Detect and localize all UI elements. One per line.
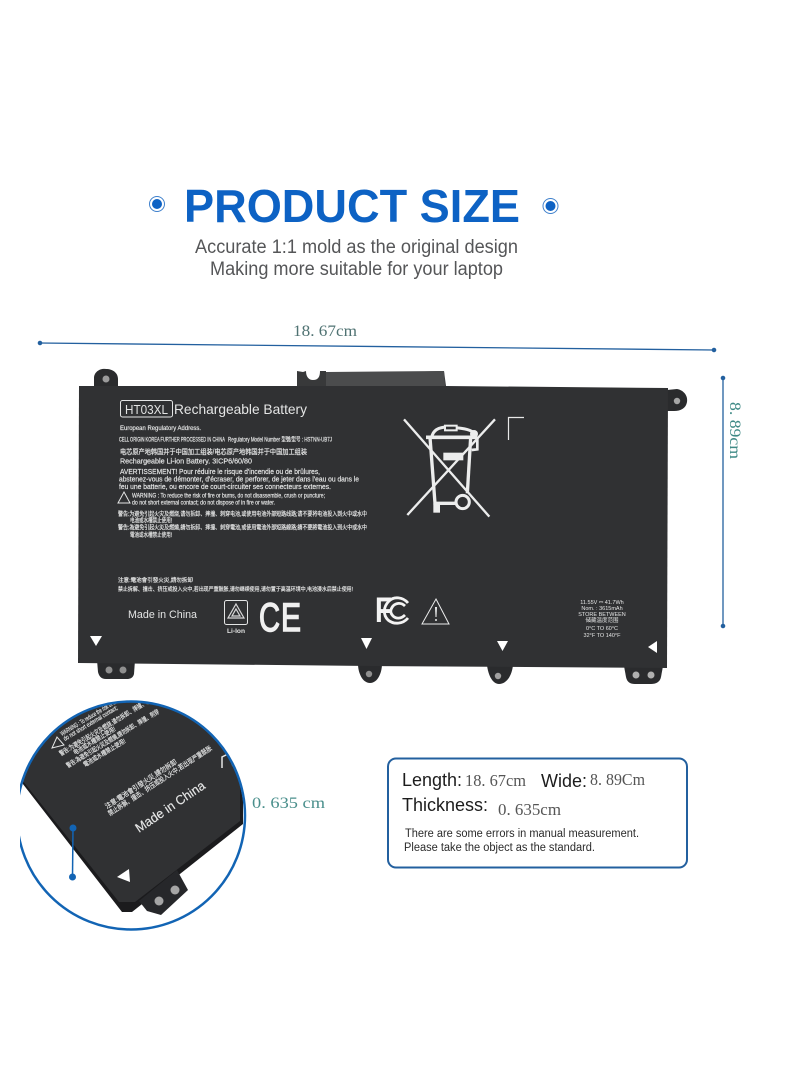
thickness label: 0. 635 cm: [252, 795, 326, 812]
battery heading: Rechargeable Battery: [174, 401, 307, 417]
length label: 18. 67cm: [293, 323, 358, 340]
battery: [78, 369, 687, 684]
bottom Chinese notes: 禁止拆解、撞击、挤压或投入火中,若出现严重鼓胀,请勿继续使用,请勿置于高温环境中,电池浸水后禁止使用!: [118, 585, 353, 593]
bottom Chinese notes: 注意:電池會引發火災,請勿拆卸: [118, 576, 193, 584]
CE mark: E: [281, 596, 301, 640]
made in China: Made in China: [128, 609, 198, 621]
bottom Chinese notes: [118, 576, 353, 593]
thickness spec: [402, 795, 561, 819]
inset blue ring: [17, 702, 245, 930]
inset printed text: 电池或水槽禁止使用!: [71, 724, 117, 757]
dimension line: length: [38, 341, 716, 352]
ratings block: STORE BETWEEN: [578, 612, 626, 618]
measurement note: Please take the object as the standard.: [404, 842, 595, 854]
thickness marker: [70, 825, 76, 880]
icon: left bullet: [150, 196, 164, 212]
regulatory text: CELL ORIGIN KOREA FURTHER PROCESSED IN CHINA: [119, 438, 225, 444]
thickness spec: 0. 635cm: [498, 800, 561, 819]
warning text: 警告:为避免引起火灾及燃烧,请勿拆卸、摔撞、刺穿电池,或使用电池外部短路线路;请不要将电池投入到火中或水中: [118, 510, 367, 518]
inset printed text: [58, 703, 212, 832]
ratings block: 0°C TO 60°C: [586, 626, 618, 632]
inset: thickness close-up: [17, 693, 326, 930]
regulatory text: European Regulatory Address.: [120, 425, 201, 432]
corner mark: [508, 418, 524, 440]
warning text: [118, 492, 367, 539]
warning text: WARNING : To reduce the risk of fire or burns, do not disassemble, crush or puncture;: [132, 492, 325, 500]
inset printed text: WARNING : To reduce the risk of fire: [59, 698, 120, 738]
spec box: [388, 758, 687, 868]
FC mark: F: [375, 591, 392, 630]
ratings block: 储藏温度范围: [585, 616, 619, 624]
subtitle: Accurate 1:1 mold as the original design: [195, 237, 518, 258]
length spec: [402, 770, 526, 790]
icon: right bullet: [543, 198, 558, 214]
regulatory text: AVERTISSEMENT! Pour réduire le risque d'incendie ou de brûlures,: [120, 467, 320, 476]
warning text: 警告:為避免引起火災及燃燒,請勿拆卸、摔撞、刺穿電池,或使用電池外部短路線路;請不要將電池投入到火中或水中: [118, 524, 367, 532]
warning text: 電池或水槽禁止使用!: [130, 531, 172, 539]
inset printed text: Made in China: [132, 777, 208, 835]
icon: recycling Li-ion: Li-Ion: [227, 628, 245, 635]
icon: crossed-out bin: [404, 419, 495, 517]
icon: recycling Li-ion: [224, 600, 248, 635]
inset printed text: 注意:電池會引發火災,請勿拆卸: [103, 757, 179, 811]
length spec: 18. 67cm: [465, 771, 526, 790]
width spec: [541, 770, 645, 791]
ratings block: [578, 600, 626, 639]
warning text: 电池或水槽禁止使用!: [130, 516, 172, 524]
subtitle: [195, 237, 518, 280]
mounting tabs: [94, 369, 687, 684]
inset printed text: 禁止拆解、撞击、挤压或投入火中,若出现严重鼓胀: [106, 744, 213, 818]
regulatory text: 电芯原产地韩国并于中国加工组装/电芯原产地韩国并于中国加工组装: [120, 447, 307, 456]
measurement note: There are some errors in manual measurement.: [405, 828, 639, 840]
inset printed text: 電池或水槽禁止使用!: [81, 736, 127, 769]
arrow markers: [90, 636, 657, 653]
width spec: Wide:: [541, 771, 587, 791]
regulatory text: [119, 425, 359, 491]
FC mark: [375, 591, 408, 630]
CE mark: [259, 596, 301, 640]
dimension line: width: [721, 376, 725, 628]
ratings block: 32°F TO 140°F: [584, 633, 621, 639]
inset printed text: 警告:為避免引起火災及燃燒,請勿拆卸、摔撞、刺穿: [64, 707, 161, 770]
regulatory text: feu une batterie, ou encore de court-circuiter ses connecteurs externes.: [119, 482, 331, 491]
inset battery: [17, 693, 245, 930]
warning text: do not short external contact; do not dispose of in fire or water.: [132, 500, 275, 506]
model badge: HT03XL: [125, 402, 168, 417]
width dimension: [721, 376, 743, 628]
measurement note: [404, 828, 639, 854]
ratings block: Nom. : 3615mAh: [581, 606, 623, 612]
regulatory text: abstenez-vous de démonter, d'écraser, de perforer, de jeter dans l'eau ou dans le: [119, 474, 359, 484]
inset printed text: do not short external contact;: [62, 705, 119, 743]
title: [150, 180, 558, 232]
CE mark: C: [259, 596, 280, 640]
regulatory text: Regulatory Model Number 型號/型号 : HSTNN-UB7J: [228, 436, 332, 444]
inset printed text: 警告:为避免引起火灾及燃烧,请勿拆卸、摔撞、刺穿: [57, 693, 156, 758]
icon: warning triangle: [422, 599, 449, 624]
length dimension: [38, 323, 716, 352]
heading: PRODUCT SIZE: [184, 180, 520, 232]
battery connector: [297, 371, 446, 386]
battery body: [78, 386, 668, 668]
thickness spec: Thickness:: [402, 795, 488, 815]
width spec: 8. 89Cm: [590, 770, 645, 789]
subtitle: Making more suitable for your laptop: [210, 259, 503, 280]
ratings block: 11.55V ⎓ 41.7Wh: [580, 600, 624, 606]
length spec: Length:: [402, 770, 462, 790]
width label: 8. 89cm: [726, 402, 743, 460]
regulatory text: Rechargeable Li-ion Battery. 3ICP6/60/80: [120, 458, 252, 466]
